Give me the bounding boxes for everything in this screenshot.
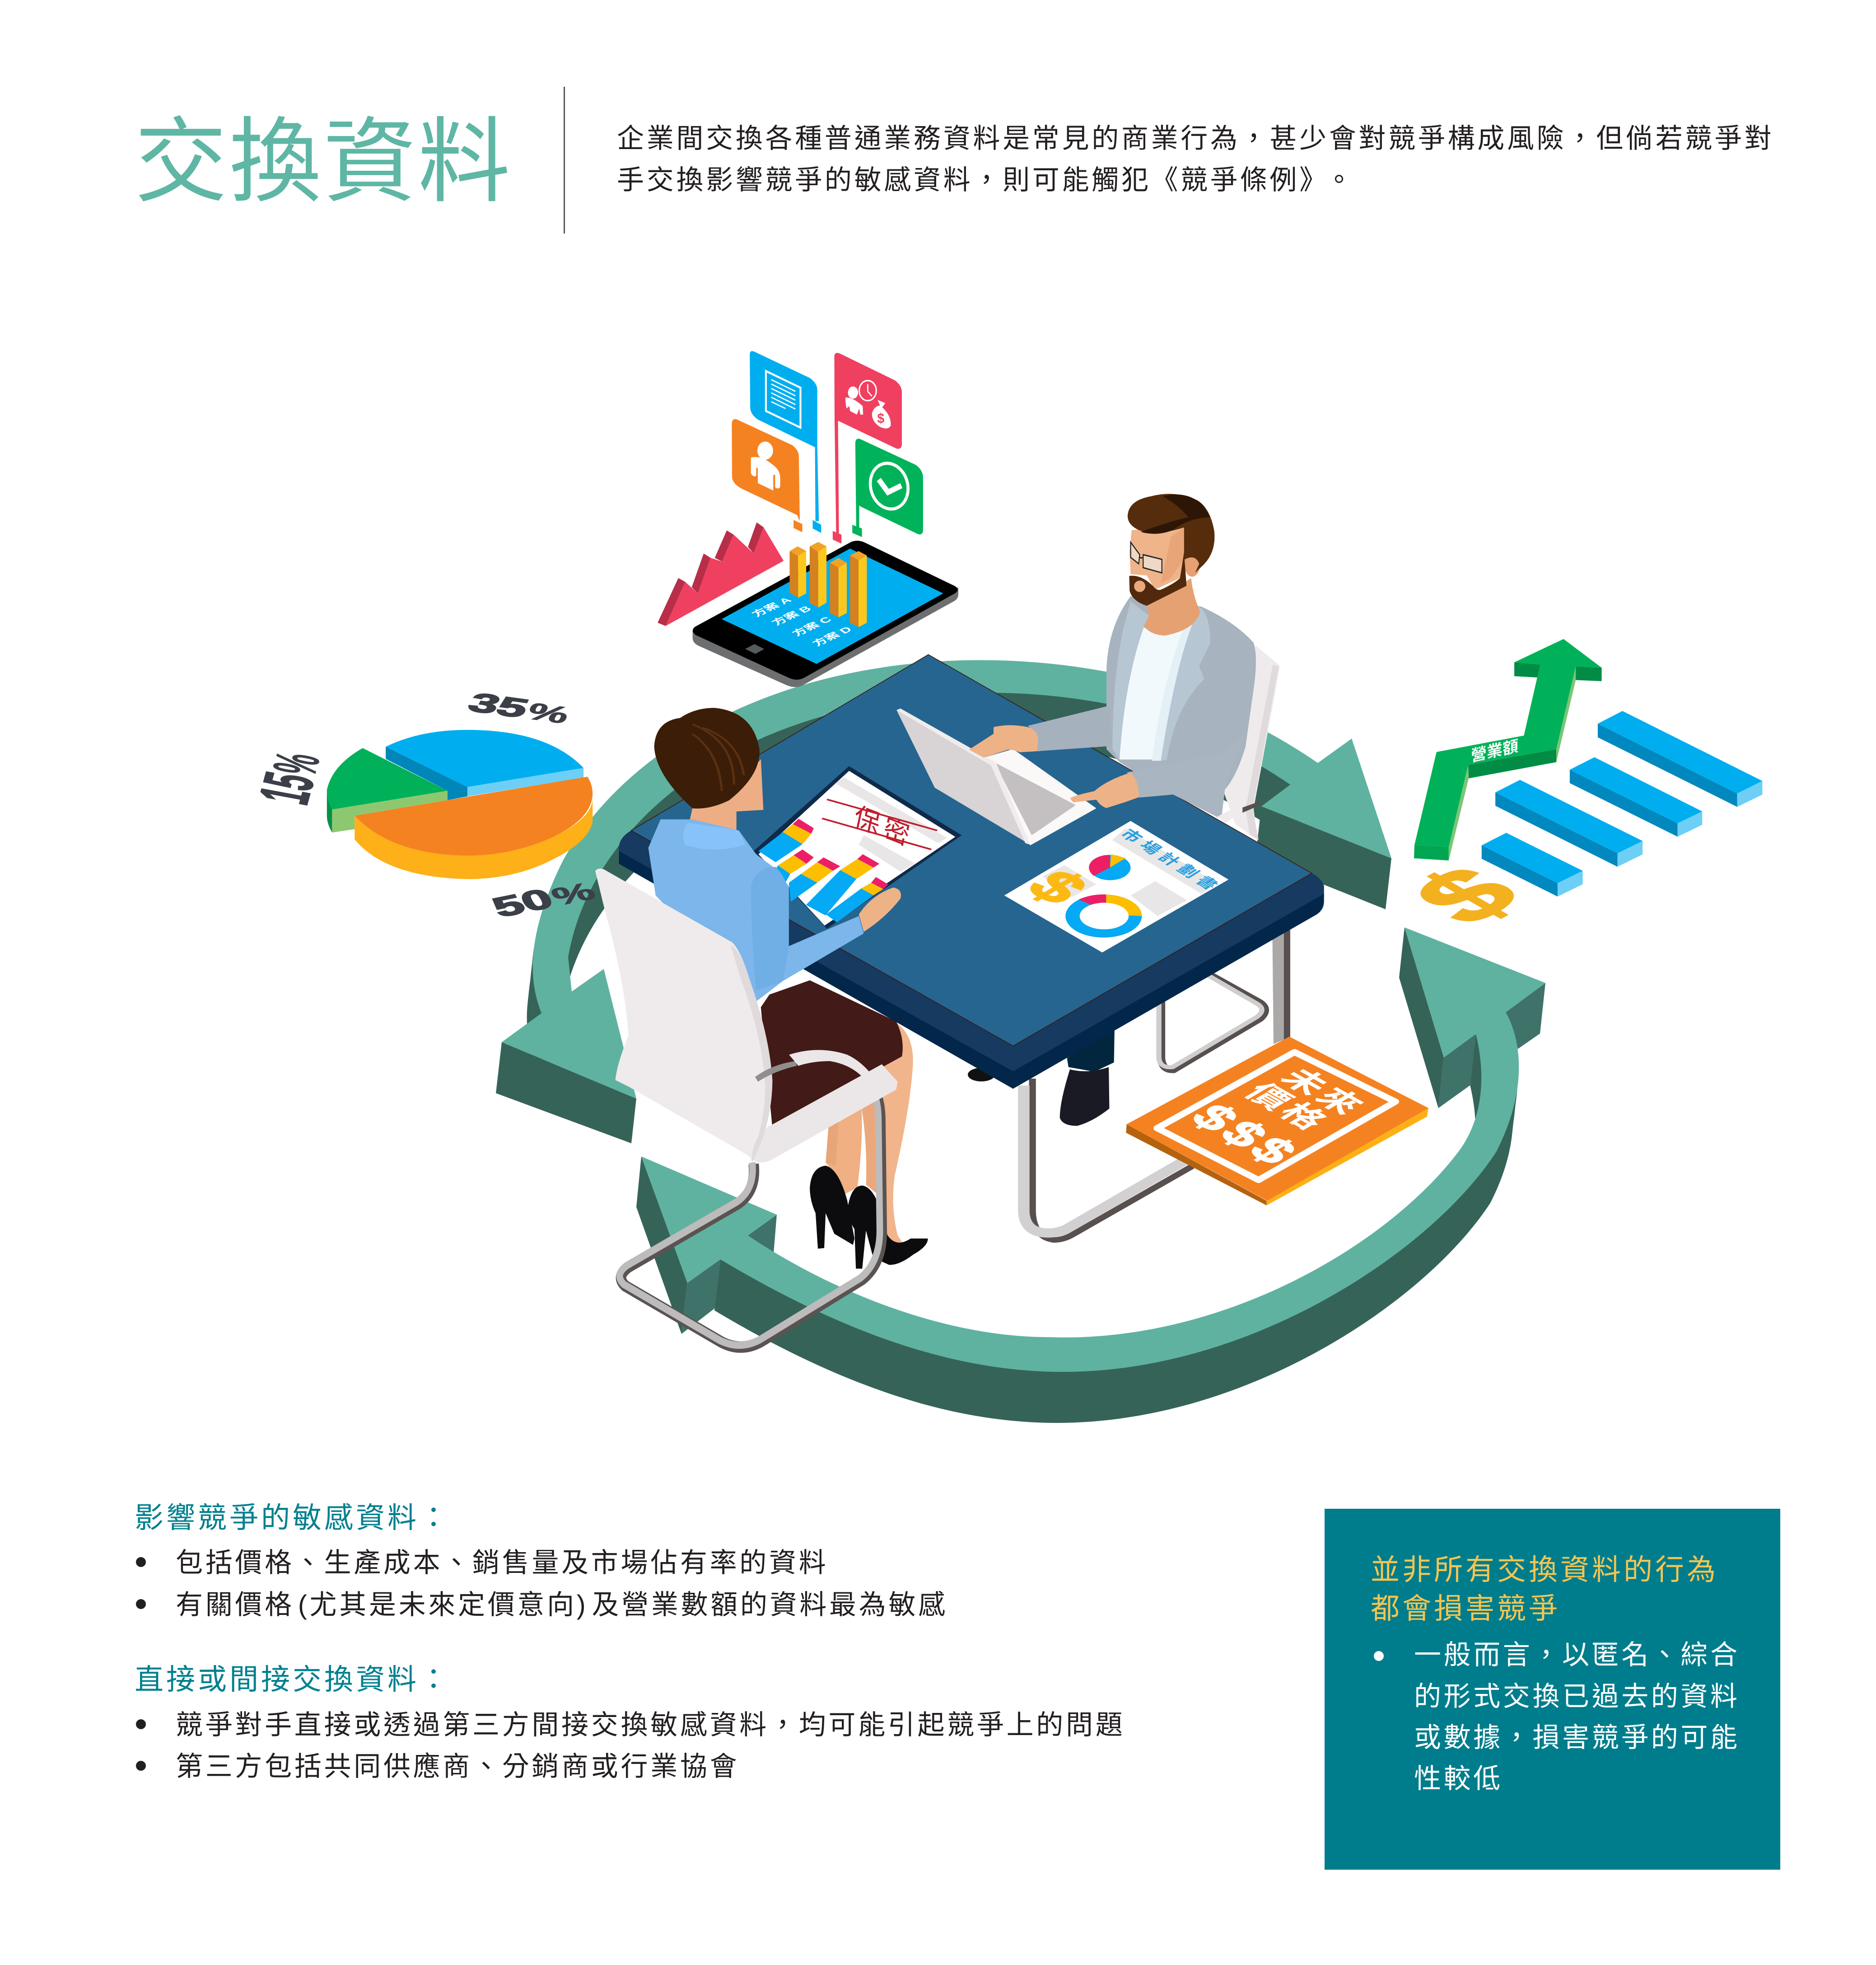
man's right arm	[1127, 734, 1246, 819]
blue bars	[1482, 711, 1762, 897]
man's chair back	[1221, 646, 1279, 840]
panel body	[1374, 1640, 1740, 1794]
sensitive information list	[136, 1548, 948, 1620]
confidential document	[754, 766, 961, 929]
woman's chair	[595, 869, 898, 1347]
hair	[1128, 494, 1214, 573]
woman's upper body	[649, 708, 901, 1001]
woman's skirt	[761, 980, 903, 1128]
table legs	[1024, 925, 1290, 1240]
green flag	[852, 439, 923, 537]
document donut	[1065, 894, 1142, 938]
intro text	[617, 123, 1774, 195]
panel body: 的形式交換已過去的資料	[1414, 1681, 1740, 1712]
jacket	[1106, 596, 1256, 811]
tablet body	[693, 541, 958, 687]
tablet option labels	[749, 596, 854, 648]
pie label 50%: 50%	[486, 875, 601, 923]
sensitive information list: 包括價格、生產成本、銷售量及市場佔有率的資料	[176, 1548, 828, 1578]
sign text: $$$	[1179, 1097, 1312, 1173]
ear	[1184, 551, 1200, 577]
laptop	[896, 708, 1097, 845]
man's pointing hand	[1070, 772, 1139, 808]
woman's blouse	[649, 819, 864, 1001]
sign text: 價格	[1237, 1078, 1338, 1137]
document pie	[1089, 854, 1130, 880]
ring extruded dark walls	[527, 666, 1518, 1423]
chair seat	[751, 1064, 898, 1162]
red mountain chart	[658, 522, 784, 626]
sensitive information heading: 影響競爭的敏感資料：	[135, 1502, 451, 1534]
exchange types list: 第三方包括共同供應商、分銷商或行業協會	[176, 1751, 739, 1782]
yellow 3D bars	[789, 542, 867, 627]
pink flag	[833, 353, 902, 544]
pie label 15%: 15%	[245, 746, 334, 809]
title divider	[564, 87, 565, 234]
panel body: 性較低	[1414, 1764, 1503, 1794]
panel body: 或數據，損害競爭的可能	[1414, 1722, 1740, 1753]
table top	[631, 655, 1312, 1046]
pie green slice	[327, 748, 448, 833]
chair armrest	[755, 1050, 880, 1090]
woman's hair	[654, 708, 760, 809]
man's arms and hands	[994, 706, 1260, 823]
man's left arm	[1028, 706, 1111, 751]
confidential stamp text: 保密	[851, 801, 916, 853]
pink flag: $	[877, 411, 884, 426]
intro text: 手交換影響競爭的敏感資料，則可能觸犯《競爭條例》 。	[617, 165, 1355, 195]
exchange types list	[136, 1710, 1125, 1782]
woman's sleeve	[751, 867, 789, 991]
tablet option labels: 方案 B	[769, 604, 814, 627]
face	[1129, 528, 1185, 590]
tablet option labels: 方案 A	[749, 596, 794, 618]
pie orange slice	[355, 777, 593, 879]
document bar chart	[758, 819, 888, 922]
man's trouser and shoes	[968, 1029, 1115, 1126]
man's hand on laptop	[994, 725, 1038, 752]
pie chart	[327, 730, 593, 879]
sign text: 未來	[1273, 1063, 1374, 1122]
green revenue arrow	[1414, 639, 1602, 861]
revenue arrow and bars	[1389, 639, 1762, 939]
pie blue slice	[386, 730, 583, 800]
tablet with flags and charts	[658, 351, 958, 687]
woman's legs	[826, 1023, 913, 1246]
revenue label: 營業額	[1471, 737, 1518, 765]
panel heading: 都會損害競爭	[1371, 1592, 1560, 1625]
woman's skirt, legs, shoes	[761, 980, 928, 1268]
glasses	[1131, 542, 1162, 573]
woman's collar	[683, 823, 745, 850]
man's chair frame	[1159, 974, 1265, 1070]
pie label 35%: 35%	[463, 688, 576, 729]
man's hand resting on laptop	[969, 726, 1040, 758]
tablet option labels: 方案 C	[789, 615, 834, 638]
document dollar sign: $	[1012, 861, 1104, 912]
dollar sign: $	[1389, 852, 1544, 939]
woman's hand	[859, 888, 901, 932]
beard	[1129, 552, 1186, 606]
neck	[1144, 578, 1200, 636]
intro text: 企業間交換各種普通業務資料是常見的商業行為，甚少會對競爭構成風險，但倘若競爭對	[617, 123, 1774, 154]
circular exchange arrows	[496, 660, 1545, 1423]
panel: not all exchanges harm competition	[1325, 1509, 1780, 1870]
exchange types list: 競爭對手直接或透過第三方間接交換敏感資料，均可能引起競爭上的問題	[176, 1710, 1125, 1740]
marketing plan document	[1004, 821, 1228, 953]
woman's high heels	[810, 1165, 928, 1268]
blue flag	[750, 351, 821, 533]
woman's neck and face	[690, 759, 763, 831]
exchange types heading: 直接或間接交換資料：	[135, 1663, 451, 1696]
jacket lapels	[1112, 601, 1210, 761]
future price sign	[1126, 1037, 1428, 1205]
panel heading	[1371, 1553, 1718, 1625]
table sides	[619, 830, 1324, 1089]
marketing plan title: 市場計劃書	[1116, 827, 1226, 895]
panel body: 一般而言，以匿名、綜合	[1414, 1640, 1740, 1670]
title: 交換資料	[135, 110, 512, 214]
man's torso and head	[1106, 494, 1256, 811]
ring top surfaces	[502, 660, 1545, 1372]
chair back	[595, 869, 772, 1162]
arrowhead walls	[496, 806, 1545, 1334]
tablet option labels: 方案 D	[810, 625, 854, 648]
man's chair arm	[1218, 801, 1260, 823]
shirt	[1120, 625, 1192, 759]
chair frame	[620, 1090, 882, 1347]
meeting table	[619, 655, 1324, 1089]
sign text	[1179, 1063, 1374, 1173]
orange flag	[732, 419, 803, 532]
sensitive information list: 有關價格(尤其是未來定價意向)及營業數額的資料最為敏感	[176, 1590, 948, 1620]
panel heading: 並非所有交換資料的行為	[1371, 1553, 1718, 1586]
